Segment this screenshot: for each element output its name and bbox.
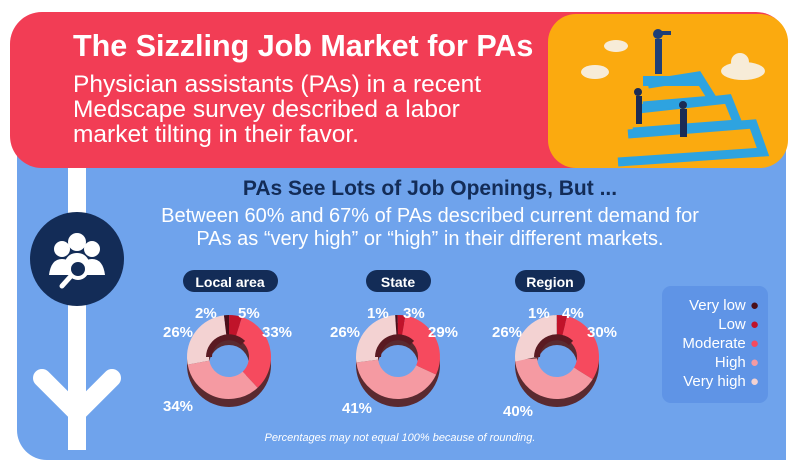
chart: donut charts: 2% [195,305,217,322]
chart: donut charts: 1% [528,305,550,322]
legend: Low ● [718,316,759,333]
chart: donut charts: 1% [367,305,389,322]
legend: Moderate ● [682,335,759,352]
panel: blue background [17,140,786,460]
title: The Sizzling Job Market for PAs [73,29,533,63]
chart: donut charts: 26% [163,324,193,341]
chart: donut charts: 40% [503,403,533,420]
legend: High ● [715,354,759,371]
panel: red header banner [10,12,788,168]
chart: donut charts: 41% [342,400,372,417]
pill: Region [515,270,585,292]
chart: donut charts: 30% [587,324,617,341]
pill: State [366,270,431,292]
chart: donut charts: 3% [403,305,425,322]
legend [662,286,768,403]
subtitle text: Physician assistants (PAs) in a recent Medscape survey described a labor market tilting in their favor. [73,71,481,148]
illustration: yellow box with stairs [548,14,788,168]
chart: donut charts: 5% [238,305,260,322]
donut: state [365,324,431,396]
chart: donut charts: 4% [562,305,584,322]
legend: Very low ● [689,297,759,314]
heading: job openings: PAs See Lots of Job Openings, But ... [243,177,617,200]
donut: region [524,324,590,396]
pill: Local area: Local area [195,274,265,290]
text: demand description: Between 60% and 67% of PAs described current demand for PAs as “very high” or “high” in their different markets. [161,205,699,250]
chart: donut charts: 26% [492,324,522,341]
chart: donut charts: 33% [262,324,292,341]
icon: people with magnifier [30,212,124,306]
pill: Region: Region [526,274,574,290]
donut: local area [194,322,264,396]
arrow: white vertical timeline arrow [33,168,121,450]
chart: donut charts: 29% [428,324,458,341]
chart: donut charts: 26% [330,324,360,341]
chart: donut charts [163,270,617,420]
footnote: Percentages may not equal 100% because of rounding. [265,432,535,444]
legend: Very high ● [683,373,759,390]
pill: Local area [183,270,278,292]
chart: donut charts: 34% [163,398,193,415]
pill: State: State [381,274,415,290]
